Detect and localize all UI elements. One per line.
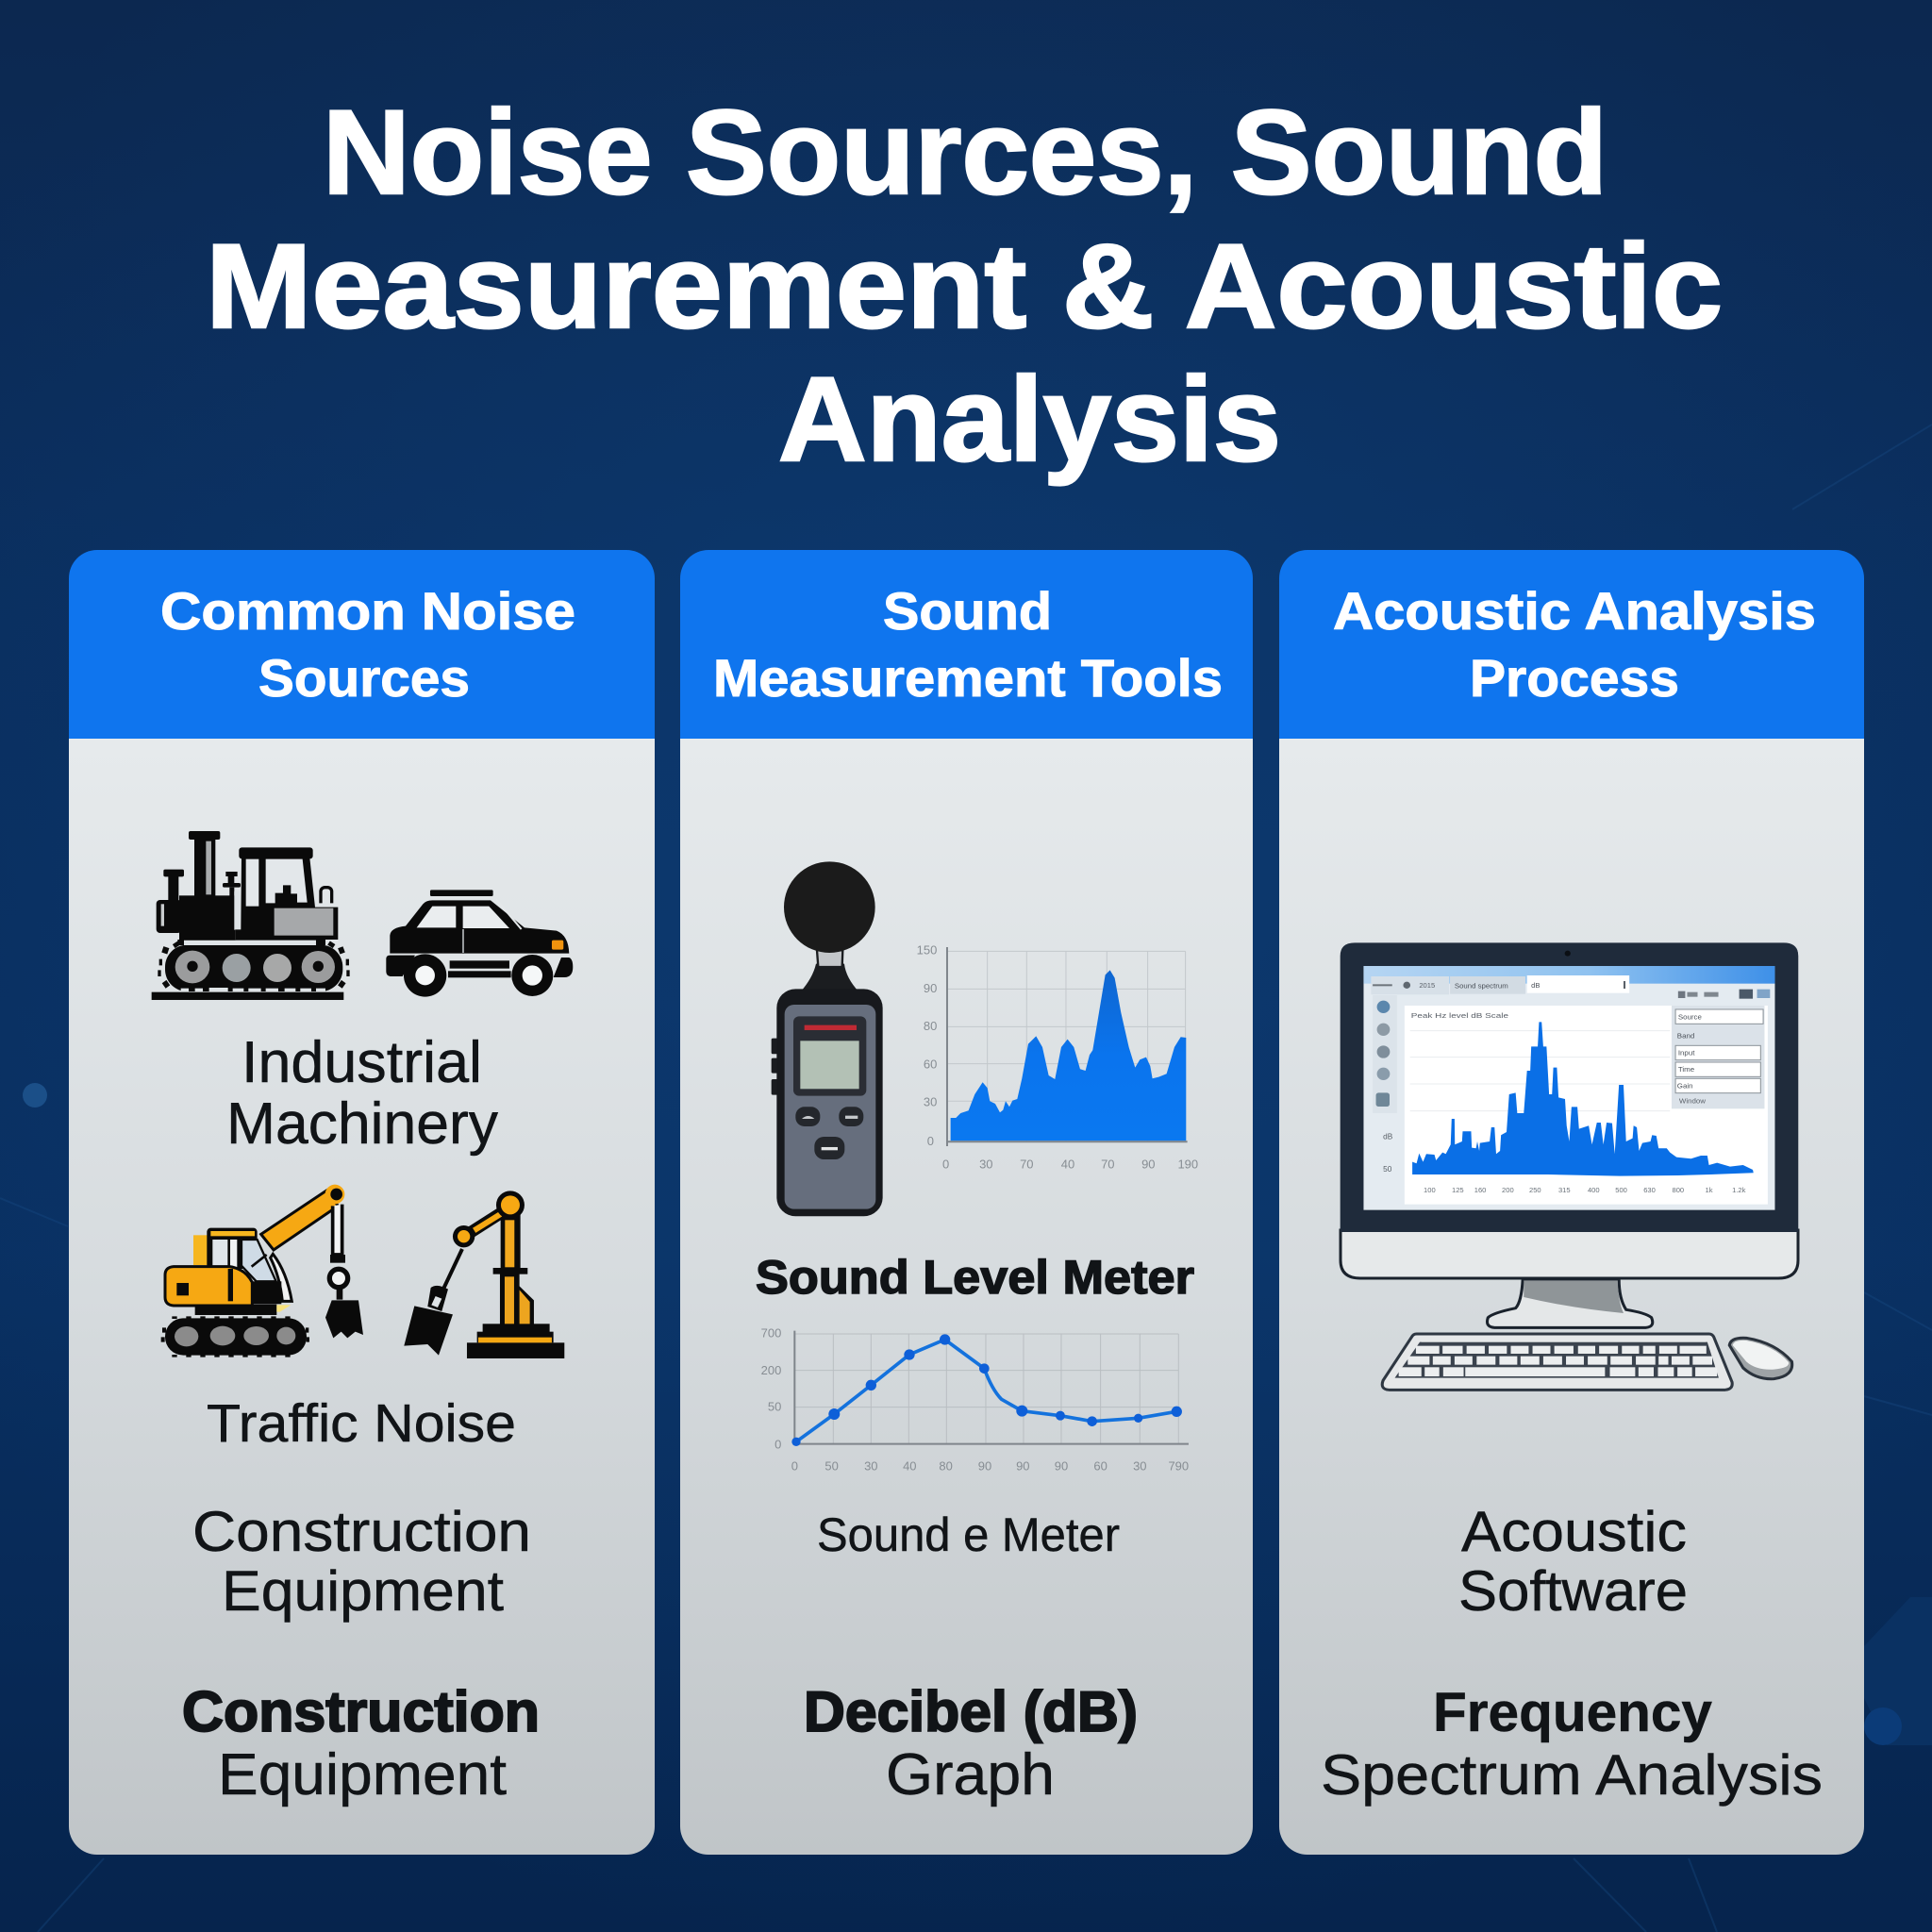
label: decibel graph: Graph: [886, 1742, 1055, 1807]
chart: area chart: 150: [917, 942, 937, 957]
label: industrial machinery: [226, 1030, 498, 1157]
label: traffic noise: Traffic Noise: [207, 1393, 516, 1454]
label: decibel graph: [804, 1680, 1138, 1807]
monitor stand: [1488, 1279, 1653, 1327]
chart: line chart: 90: [1016, 1458, 1030, 1473]
chart: area chart: 30: [924, 1095, 937, 1109]
monitor screen and bezel: 125: [1452, 1186, 1464, 1194]
label: frequency spectrum analysis: Spectrum Analysis: [1321, 1743, 1823, 1807]
icon: crawler machine: [152, 831, 350, 1000]
label: construction equipment: Construction: [192, 1500, 531, 1563]
chart: line chart: 700: [761, 1326, 781, 1341]
monitor screen and bezel: Band: [1677, 1032, 1694, 1041]
chart: line chart: [761, 1326, 1189, 1473]
label: decibel graph: Decibel (dB): [804, 1680, 1138, 1743]
panel header: common noise sources: Common Noise: [160, 581, 575, 641]
monitor screen and bezel: 200: [1502, 1186, 1514, 1194]
label: industrial machinery: Machinery: [226, 1091, 498, 1157]
monitor screen and bezel: Sound spectrum: [1455, 982, 1508, 991]
chart: line chart: 90: [978, 1458, 991, 1473]
panel: common noise sources: [69, 550, 655, 1855]
monitor screen and bezel: Input: [1678, 1049, 1695, 1058]
label: industrial machinery: Industrial: [242, 1030, 482, 1095]
monitor screen and bezel: 315: [1558, 1186, 1571, 1194]
chart: line chart: 40: [903, 1458, 917, 1473]
monitor screen and bezel: 1k: [1706, 1186, 1713, 1194]
panel header: acoustic analysis process: [1279, 550, 1864, 739]
chart: area chart: [917, 942, 1198, 1171]
chart: line chart: 200: [761, 1363, 781, 1377]
monitor screen and bezel: 50: [1383, 1165, 1392, 1174]
label: acoustic software: [1458, 1500, 1688, 1623]
label: frequency spectrum analysis: [1321, 1682, 1823, 1807]
keyboard: [1382, 1334, 1732, 1390]
chart: area chart: 40: [1061, 1157, 1074, 1171]
monitor chin: [1341, 1230, 1798, 1278]
mouse: [1729, 1338, 1792, 1379]
panel header: sound measurement tools: Measurement Tools: [713, 648, 1223, 708]
monitor screen and bezel: Peak Hz level dB Scale: [1411, 1011, 1508, 1020]
label: frequency spectrum analysis: Frequency: [1433, 1682, 1712, 1743]
label: sound level meter: Sound Level Meter: [756, 1251, 1194, 1304]
label: construction equipment bold: Construction: [182, 1680, 540, 1743]
chart: line chart: 60: [1093, 1458, 1108, 1473]
label: construction equipment: [192, 1500, 531, 1623]
icon: sound level meter: [772, 861, 883, 1216]
label: construction equipment bold: [182, 1680, 540, 1807]
chart: area chart: 70: [1020, 1157, 1034, 1171]
chart: area chart: 190: [1177, 1157, 1198, 1171]
chart: line chart: 0: [791, 1458, 798, 1473]
panel header: sound measurement tools: [680, 550, 1253, 739]
chart: line chart: 0: [774, 1437, 781, 1451]
monitor screen and bezel: 500: [1615, 1186, 1627, 1194]
chart: area chart: 0: [942, 1157, 949, 1171]
icon: excavator: [161, 1185, 363, 1357]
label: construction equipment bold: Equipment: [218, 1742, 507, 1807]
chart: area chart: 60: [924, 1058, 937, 1072]
title: Analysis: [778, 352, 1281, 486]
title: [206, 85, 1723, 486]
monitor screen and bezel: Window: [1679, 1096, 1706, 1105]
title: Noise Sources, Sound: [323, 85, 1607, 219]
label: construction equipment: Equipment: [222, 1559, 504, 1623]
monitor screen and bezel: 100: [1424, 1186, 1436, 1194]
chart: area chart: 90: [1141, 1157, 1156, 1171]
chart: line chart: 90: [1055, 1458, 1068, 1473]
panel header: sound measurement tools: Sound: [883, 581, 1052, 641]
monitor screen and bezel: 2015: [1419, 981, 1435, 990]
monitor screen and bezel: 400: [1588, 1186, 1600, 1194]
panel header: common noise sources: Sources: [258, 648, 470, 708]
icon: robotic arm: [404, 1191, 564, 1358]
monitor screen and bezel: dB: [1383, 1132, 1392, 1141]
monitor screen and bezel: 800: [1673, 1186, 1684, 1194]
panel header: common noise sources: [69, 550, 655, 739]
monitor screen and bezel: dB: [1531, 981, 1540, 990]
label: acoustic software: Software: [1458, 1559, 1688, 1623]
chart: line chart: 80: [939, 1458, 953, 1473]
monitor screen and bezel: 160: [1474, 1186, 1486, 1194]
chart: area chart: 80: [924, 1019, 937, 1033]
monitor screen and bezel: Time: [1678, 1065, 1694, 1074]
chart: area chart: 90: [924, 981, 937, 995]
panel header: acoustic analysis process: Acoustic Analysis: [1333, 581, 1816, 641]
title: Measurement & Acoustic: [206, 219, 1723, 353]
chart: line chart: 30: [864, 1458, 878, 1473]
label: sound meter: Sound e Meter: [817, 1508, 1120, 1561]
chart: area chart: 70: [1101, 1157, 1115, 1171]
chart: area chart: 0: [927, 1134, 934, 1148]
icon: car: [386, 890, 573, 997]
panel header: acoustic analysis process: Process: [1470, 648, 1679, 708]
chart: line chart: 50: [824, 1458, 839, 1473]
monitor screen and bezel: Source: [1678, 1013, 1702, 1022]
monitor screen and bezel: 1.2k: [1732, 1186, 1746, 1194]
monitor screen and bezel: 250: [1529, 1186, 1541, 1194]
icon: desktop monitor with software: [1341, 942, 1798, 1390]
monitor screen and bezel: 630: [1643, 1186, 1656, 1194]
monitor screen and bezel: [1341, 942, 1798, 1232]
panel: sound measurement tools: [680, 550, 1253, 1855]
chart: area chart: 30: [979, 1157, 993, 1171]
monitor screen and bezel: Gain: [1677, 1081, 1693, 1090]
panel: acoustic analysis process: [1279, 550, 1864, 1855]
label: acoustic software: Acoustic: [1461, 1500, 1687, 1563]
chart: line chart: 790: [1168, 1458, 1189, 1473]
chart: line chart: 30: [1133, 1458, 1147, 1473]
chart: line chart: 50: [768, 1399, 781, 1413]
